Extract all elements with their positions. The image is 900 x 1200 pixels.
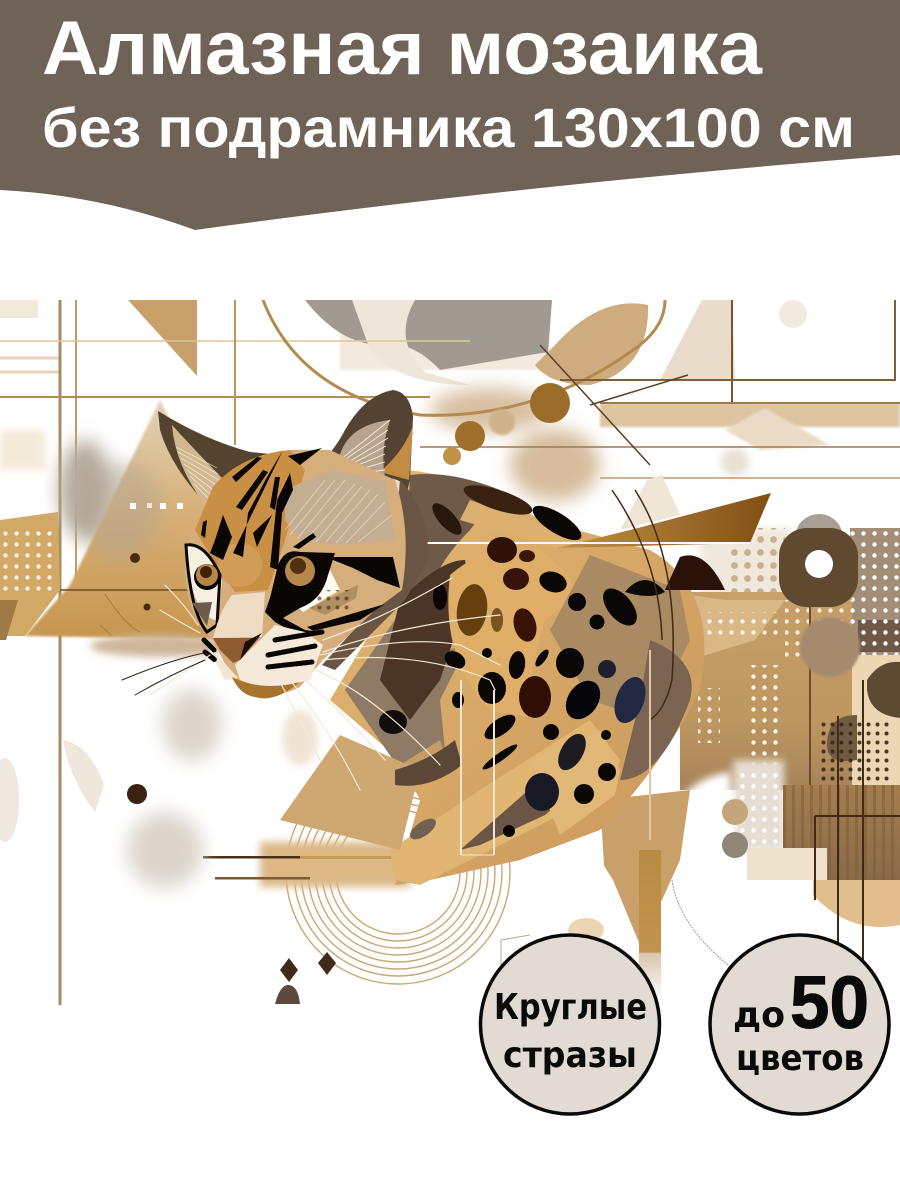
tail wedge bbox=[557, 493, 771, 548]
halftone top bbox=[700, 528, 900, 658]
tan field bbox=[665, 592, 900, 850]
donut ring bbox=[779, 528, 858, 607]
badge: up to 50 colours: цветов bbox=[736, 1038, 864, 1079]
badge: up to 50 colours: до bbox=[733, 995, 785, 1036]
left ear bbox=[158, 411, 290, 510]
forehead bbox=[195, 450, 395, 592]
horizontal light line bbox=[310, 542, 750, 544]
left eye bbox=[186, 543, 222, 632]
thin frame lines bbox=[0, 300, 900, 1005]
banner shape bbox=[0, 0, 900, 230]
right ear bbox=[307, 390, 413, 515]
right eye bbox=[265, 551, 400, 636]
bottom spiral rings bbox=[286, 790, 511, 985]
title: Алмазная мозаика bbox=[42, 6, 763, 91]
head stripes bbox=[201, 448, 322, 570]
pale blobs bbox=[0, 689, 318, 888]
cat spots bbox=[379, 479, 651, 843]
horizontal bars near rings bbox=[203, 842, 410, 887]
upper geometric shapes bbox=[0, 300, 900, 501]
cat body bbox=[280, 470, 704, 885]
flank curves and frame bbox=[461, 490, 673, 855]
hind leg and pillar bbox=[501, 790, 755, 1000]
floating circles bbox=[443, 383, 570, 465]
badge: round rhinestones bbox=[480, 935, 660, 1114]
left tan triangle bbox=[0, 400, 221, 662]
badge: round rhinestones: Круглые bbox=[494, 987, 647, 1028]
right halftone panel bbox=[665, 514, 900, 962]
muzzle stripes bbox=[204, 632, 322, 667]
badge: up to 50 colours bbox=[710, 935, 889, 1114]
cat head bbox=[185, 450, 406, 695]
badge: round rhinestones: стразы bbox=[503, 1035, 637, 1076]
artwork: abstract background bbox=[0, 300, 900, 1005]
header banner bbox=[0, 0, 900, 230]
muzzle bbox=[204, 592, 323, 698]
badge: up to 50 colours: 50 bbox=[790, 961, 869, 1044]
diamonds bbox=[275, 952, 336, 1004]
cat bbox=[122, 390, 771, 885]
cat neck bbox=[322, 480, 428, 670]
whiskers bbox=[122, 578, 500, 790]
subtitle: без подрамника 130х100 см bbox=[42, 96, 855, 159]
